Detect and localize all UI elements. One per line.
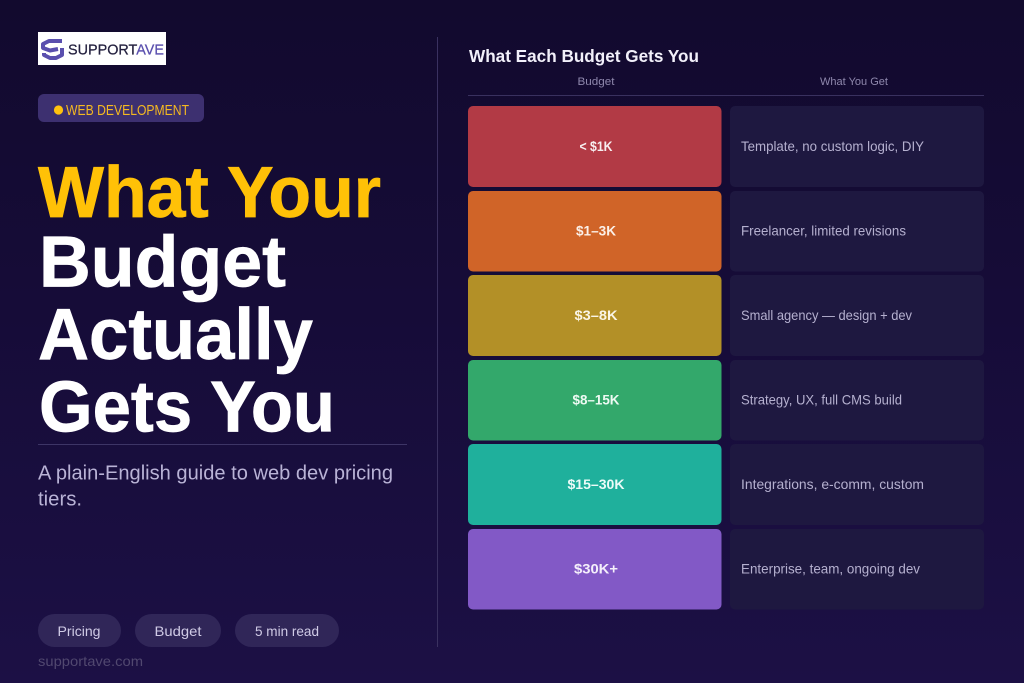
category badge <box>38 94 204 122</box>
badge label: WEB DEVELOPMENT <box>66 103 189 119</box>
title: Actually <box>38 295 313 375</box>
row: $30K+ <box>468 529 984 610</box>
divider <box>437 37 438 647</box>
row: under $1K: Template, no custom logic, DIY <box>741 138 925 154</box>
tag: Budget <box>135 614 221 647</box>
logo: SupportAve <box>38 32 166 65</box>
icon: logo mark <box>43 41 62 58</box>
title <box>38 153 381 448</box>
row: $8–15K: $8–15K <box>572 392 620 408</box>
tag: 5 min read: 5 min read <box>255 623 319 639</box>
subtitle: tiers. <box>38 488 82 510</box>
website url: supportave.com <box>38 653 143 669</box>
row: under $1K: < $1K <box>580 138 612 154</box>
row: $30K+: Enterprise, team, ongoing dev <box>741 560 920 576</box>
title: What Your <box>38 153 381 233</box>
tag: Budget: Budget <box>154 623 202 639</box>
subtitle: A plain-English guide to web dev pricing <box>38 462 393 484</box>
row: $30K+: $30K+ <box>574 560 618 576</box>
row: $15–30K <box>468 444 984 525</box>
badge dot <box>54 105 63 115</box>
table heading: What Each Budget Gets You <box>469 46 699 66</box>
tag: 5 min read <box>235 614 339 647</box>
logo wordmark: SUPPORTAVE <box>68 42 164 58</box>
title rule <box>38 444 407 445</box>
row: under $1K <box>468 106 984 187</box>
column header: Budget: Budget <box>578 76 614 88</box>
subtitle <box>38 462 393 510</box>
row: $15–30K: $15–30K <box>568 476 624 492</box>
row: $1–3K: Freelancer, limited revisions <box>741 222 906 238</box>
tag: Pricing <box>38 614 121 647</box>
row: $8–15K <box>468 360 984 440</box>
row: $1–3K: $1–3K <box>576 222 616 238</box>
row: $3–8K <box>468 275 984 356</box>
column header: What You Get: What You Get <box>820 76 888 88</box>
tag: Pricing: Pricing <box>58 623 100 639</box>
row: $15–30K: Integrations, e-comm, custom <box>741 476 924 492</box>
row: $1–3K <box>468 191 984 272</box>
row: $3–8K: Small agency — design + dev <box>741 307 912 323</box>
row: $3–8K: $3–8K <box>574 307 618 323</box>
header rule <box>468 95 984 96</box>
row: $8–15K: Strategy, UX, full CMS build <box>741 392 902 408</box>
title: Gets You <box>39 368 335 448</box>
title: Budget <box>39 222 286 302</box>
